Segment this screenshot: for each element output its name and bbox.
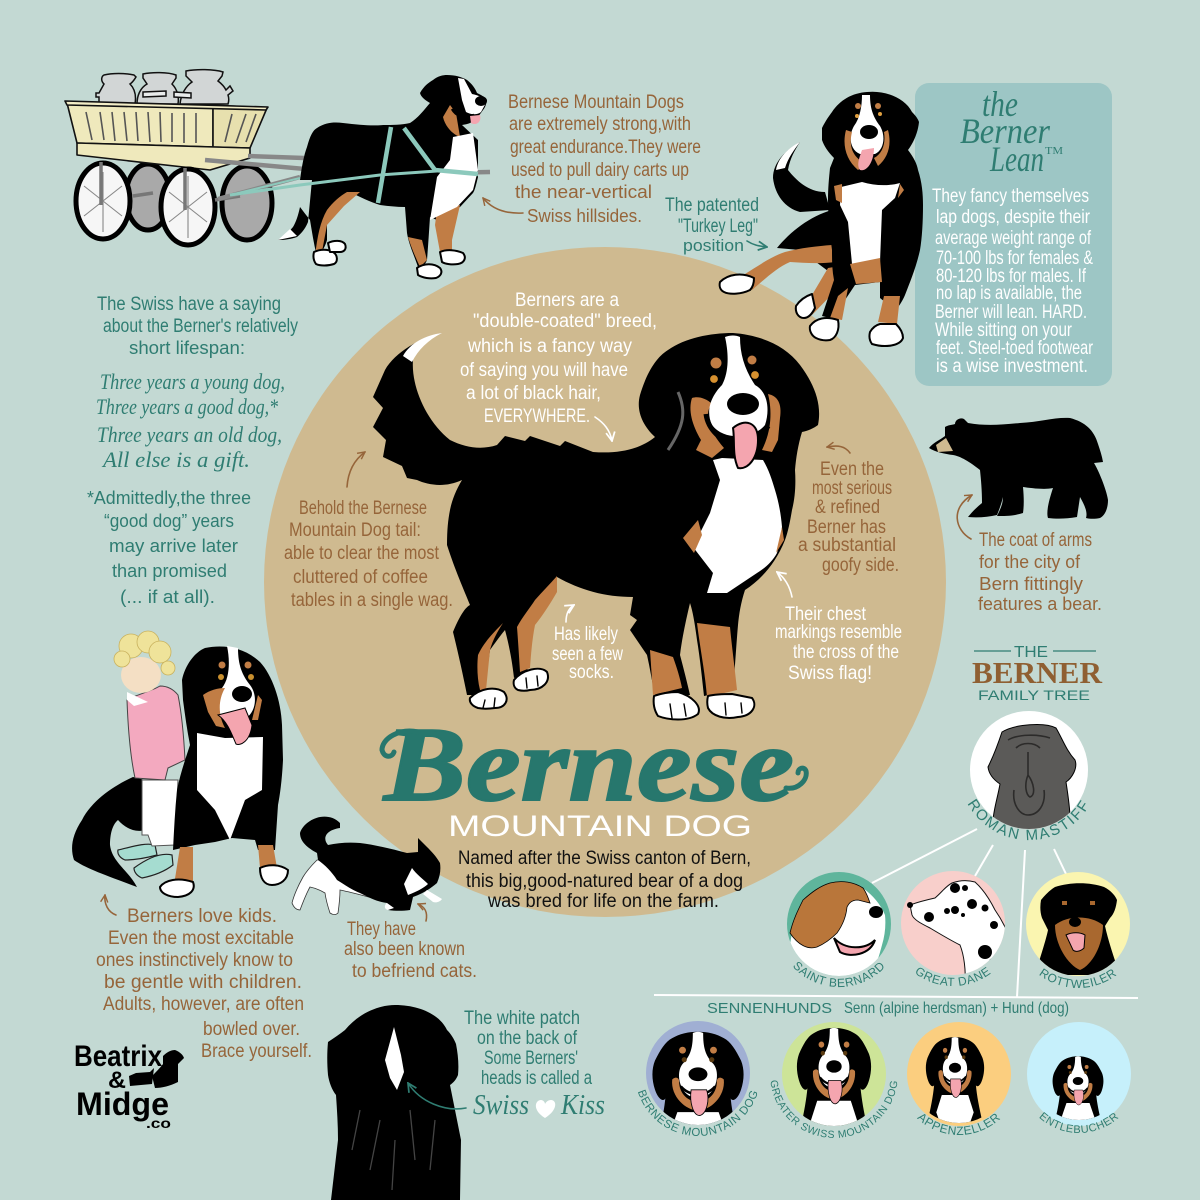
text: Turkey Leg note: "Turkey Leg" xyxy=(678,216,758,237)
tan cheeks xyxy=(690,394,780,458)
text: goofy side note: Even the xyxy=(820,459,884,480)
text: double coat note: "double-coated" breed, xyxy=(473,311,657,332)
text: goofy side note: Berner has xyxy=(807,517,886,538)
tan chest edges and belly xyxy=(834,184,904,284)
dog paws xyxy=(160,865,288,897)
text: Swiss Kiss note: on the back of xyxy=(477,1028,578,1049)
dog: white chest, tail tip and muzzle xyxy=(278,78,487,240)
text: goofy side note: a substantial xyxy=(798,535,896,556)
circle xyxy=(1026,872,1130,976)
panel body text: is a wise investment. xyxy=(936,356,1088,377)
portrait: Bernese Mountain Dog xyxy=(646,1021,750,1125)
dog blaze and muzzle xyxy=(216,646,255,718)
tan brows xyxy=(1062,901,1095,905)
text: double coat note: of saying you will have xyxy=(460,360,628,381)
text: dairy cart note xyxy=(508,92,701,226)
text: poem: Three years an old dog, xyxy=(97,422,282,447)
white blaze and muzzle xyxy=(709,336,768,436)
label: Entlebucher: ENTLEBUCHER xyxy=(1039,1112,1118,1133)
text: dairy cart note: Bernese Mountain Dogs xyxy=(508,92,684,113)
white Swiss kiss patch xyxy=(385,1027,404,1090)
text: dairy cart note: the near-vertical xyxy=(515,182,652,202)
text: chest marking note xyxy=(775,604,902,684)
nose xyxy=(1069,917,1081,927)
tail xyxy=(773,142,830,212)
arrow: to tail xyxy=(347,452,365,487)
text: double coat note: which is a fancy way xyxy=(467,336,632,357)
arrow: to chest xyxy=(777,572,792,597)
text: footnote: (... if at all). xyxy=(120,587,215,607)
text: kids note: Brace yourself. xyxy=(201,1041,312,1062)
text: cat note: They have xyxy=(347,919,416,940)
panel body text: no lap is available, the xyxy=(936,283,1082,304)
text: Sennenhunds heading xyxy=(707,1000,1069,1017)
wagon box xyxy=(65,101,268,170)
rear haunch and body xyxy=(777,210,860,280)
panel: the Berner Lean xyxy=(915,83,1112,386)
dog xyxy=(796,1028,872,1126)
text: socks note: socks. xyxy=(569,662,614,683)
cat tail and black body xyxy=(300,817,440,911)
portrait: Entlebucher xyxy=(1027,1022,1131,1132)
circle xyxy=(901,871,1005,975)
illustration: back of Berner's head xyxy=(327,1005,461,1200)
white head and chest xyxy=(790,888,886,976)
black head and body xyxy=(1035,883,1120,975)
text: tail note: cluttered of coffee xyxy=(293,567,428,588)
text: Swiss saying xyxy=(97,294,298,358)
panel body text: 80-120 lbs for males. If xyxy=(936,266,1087,287)
white tail tip xyxy=(403,333,442,362)
panel body text xyxy=(932,186,1094,377)
shoes xyxy=(118,844,173,878)
text: cat note: also been known xyxy=(344,939,465,960)
smile xyxy=(706,414,768,444)
white blaze and muzzle xyxy=(851,95,883,154)
text: Swiss Kiss note xyxy=(464,1008,592,1089)
tan inner leg xyxy=(812,266,840,315)
illustration: Turkey Leg dog xyxy=(720,92,923,346)
dane spots xyxy=(907,883,998,966)
dog: black coat xyxy=(278,75,487,267)
child's pants xyxy=(142,780,178,846)
label: Roman Mastiff: ROMAN MASTIFF xyxy=(968,798,1086,840)
text: kids note: be gentle with children. xyxy=(104,972,302,993)
jacket collar xyxy=(127,692,148,706)
arrow: to coat xyxy=(595,417,612,441)
text: intro: Named after the Swiss canton of Bern, xyxy=(458,848,751,869)
icon: heart xyxy=(536,1100,555,1118)
text: double coat note: EVERYWHERE. xyxy=(484,406,590,427)
eyes and brows xyxy=(855,103,882,118)
panel body text: They fancy themselves xyxy=(932,186,1089,207)
dane head and neck xyxy=(910,880,1005,974)
panel body text: 70-100 lbs for females & xyxy=(936,248,1093,269)
child's pink jacket xyxy=(127,686,185,780)
mouth xyxy=(834,938,875,955)
dog tan legs xyxy=(174,845,277,885)
text: goofy side note: & refined xyxy=(815,497,880,518)
tongue xyxy=(858,148,874,170)
logo dog xyxy=(152,1050,184,1088)
text: bear note: features a bear. xyxy=(978,594,1102,614)
text: goofy side note: goofy side. xyxy=(822,555,899,576)
label: Greater Swiss Mountain Dog: GREATER SWISS MOUNTAIN DOG xyxy=(770,1080,898,1138)
text: bear note xyxy=(978,530,1102,614)
mastiff head xyxy=(988,725,1076,830)
text: dairy cart note: great endurance.They were xyxy=(510,137,701,158)
arrow: to face xyxy=(827,446,850,453)
text: footnote: “good dog” years xyxy=(104,511,234,531)
text: Turkey Leg note: position xyxy=(683,236,744,255)
text: chest marking note: markings resemble xyxy=(775,622,902,643)
text: Swiss saying: The Swiss have a saying xyxy=(97,294,281,315)
fur strokes xyxy=(352,1110,435,1190)
illustration: dog pulling milk cart xyxy=(65,70,490,278)
text: intro: was bred for life on the farm. xyxy=(487,891,719,912)
text: poem: All else is a gift. xyxy=(101,447,250,472)
white paws xyxy=(470,669,754,720)
arrow: to turkey leg xyxy=(747,241,767,247)
dog tongue xyxy=(218,708,252,744)
label: Appenzeller: APPENZELLER xyxy=(917,1114,1000,1135)
portrait: Rottweiler xyxy=(1026,872,1130,976)
Sennenhunds: SENNENHUNDS xyxy=(707,1000,832,1017)
tan cheeks xyxy=(844,130,890,170)
text: tail note: Mountain Dog tail: xyxy=(289,520,421,541)
logo cat xyxy=(129,1068,154,1086)
text: kids note: ones instinctively know to xyxy=(96,950,293,971)
text: intro xyxy=(458,848,751,912)
text: Turkey Leg note xyxy=(665,195,759,255)
portrait: Great Dane xyxy=(901,871,1005,975)
circle xyxy=(907,1022,1011,1126)
white tail tip xyxy=(776,142,800,170)
text: Turkey Leg note: The patented xyxy=(665,195,759,216)
text: kids note xyxy=(96,906,312,1062)
label: Bernese Mountain Dog: BERNESE MOUNTAIN DOG xyxy=(638,1090,758,1136)
circle xyxy=(1027,1022,1131,1126)
eyes and brows xyxy=(710,356,760,384)
text: kids note: bowled over. xyxy=(203,1019,300,1040)
text: kids note: Adults, however, are often xyxy=(103,994,304,1015)
panel background xyxy=(915,83,1112,386)
dog xyxy=(652,1032,744,1125)
circle xyxy=(787,872,891,976)
cat white chest and paws xyxy=(385,868,442,910)
THE: THE xyxy=(1014,644,1048,661)
text: socks note: seen a few xyxy=(552,644,623,665)
logo words: .co xyxy=(146,1115,171,1131)
text: kids note: Berners love kids. xyxy=(127,906,277,927)
wheel spokes and axles xyxy=(84,162,240,238)
portrait: Roman Mastiff xyxy=(970,711,1088,830)
text: tail note xyxy=(284,498,453,611)
portrait: Appenzeller xyxy=(907,1022,1011,1131)
text: chest marking note: Swiss flag! xyxy=(788,663,872,684)
text: footnote xyxy=(87,488,251,607)
cart shafts xyxy=(205,156,490,199)
teal harness xyxy=(230,127,478,203)
arrow: to Swiss Kiss xyxy=(408,1083,466,1109)
milk cans xyxy=(96,70,233,104)
text: bear note: Bern fittingly xyxy=(979,574,1083,594)
text: kids note: Even the most excitable xyxy=(108,928,294,949)
dog tail xyxy=(72,777,145,887)
title swash xyxy=(382,731,806,788)
text: footnote: than promised xyxy=(112,561,227,581)
text: bear note: for the city of xyxy=(979,552,1081,572)
text: double coat note xyxy=(460,290,657,427)
dog: paws xyxy=(313,241,465,278)
dog black body xyxy=(173,647,283,850)
child's curly hair xyxy=(114,631,175,675)
panel body text: lap dogs, despite their xyxy=(936,207,1091,228)
panel title: the xyxy=(982,84,1018,124)
logo words: Midge xyxy=(76,1086,169,1122)
circle xyxy=(782,1022,886,1126)
text: double coat note: a lot of black hair, xyxy=(466,383,601,404)
circle xyxy=(646,1021,750,1125)
tongue xyxy=(733,423,758,468)
text: dairy cart note: used to pull dairy carts up xyxy=(511,160,689,181)
text: dairy cart note: Swiss hillsides. xyxy=(527,206,642,226)
tan chest edges xyxy=(683,520,784,553)
text: cat note xyxy=(344,919,477,982)
label: Rottweiler: ROTTWEILER xyxy=(1039,968,1116,988)
text: footnote: may arrive later xyxy=(109,536,238,556)
nose xyxy=(860,125,878,139)
arrow: to bear xyxy=(957,495,972,539)
text: tail note: able to clear the most xyxy=(284,543,440,564)
text: chest marking note: the cross of the xyxy=(793,642,899,663)
text: Swiss saying: about the Berner's relatively xyxy=(103,316,298,337)
black torso and head xyxy=(822,92,923,320)
white rear paws xyxy=(720,275,815,318)
tan front legs xyxy=(830,288,900,324)
etymology: Senn (alpine herdsman) + Hund (dog) xyxy=(844,1000,1069,1017)
dog xyxy=(925,1037,985,1131)
tan central circle xyxy=(264,247,946,917)
text: goofy side note: most serious xyxy=(812,478,892,499)
dog: mouth, nose and tongue xyxy=(452,96,487,124)
illustration: child with Bernese xyxy=(72,631,288,897)
white chest xyxy=(840,182,900,264)
dog eyes and brows xyxy=(218,662,254,680)
child's face xyxy=(121,657,161,693)
text: footnote: *Admittedly,the three xyxy=(87,488,251,508)
heading rules xyxy=(974,650,1096,652)
illustration: main Bernese Mountain Dog xyxy=(373,333,819,720)
portrait: Greater Swiss Mountain Dog xyxy=(782,1022,886,1126)
white front paws xyxy=(810,318,903,346)
text: Swiss saying: short lifespan: xyxy=(129,338,245,358)
panel title: Berner xyxy=(960,111,1051,151)
front wheels xyxy=(76,163,215,245)
subtitle: Mountain Dog: MOUNTAIN DOG xyxy=(448,810,752,843)
text: Swiss Kiss note: The white patch xyxy=(464,1008,580,1029)
text: Swiss Kiss: Swiss xyxy=(473,1090,529,1121)
FAMILY TREE: FAMILY TREE xyxy=(978,687,1090,703)
label: Great Dane: GREAT DANE xyxy=(916,966,991,986)
illustration: black and white cat xyxy=(292,817,442,914)
text: socks note: Has likely xyxy=(554,624,618,645)
dog nose xyxy=(232,686,252,702)
text: poem: Three years a good dog,* xyxy=(96,394,278,419)
portrait circle xyxy=(970,711,1088,829)
cat white legs and belly xyxy=(292,860,400,914)
panel body text: Berner will lean. HARD. xyxy=(935,302,1087,323)
nose xyxy=(869,906,883,918)
tan legs xyxy=(477,576,737,697)
dog white chest xyxy=(197,733,263,840)
arrow: to cat xyxy=(418,904,427,921)
text: Swiss Kiss xyxy=(473,1090,605,1121)
tongue xyxy=(1066,933,1085,951)
panel body text: feet. Steel-toed footwear xyxy=(936,338,1094,359)
text: poem xyxy=(96,369,285,472)
white chest xyxy=(693,458,782,593)
label: Saint Bernard: SAINT BERNARD xyxy=(794,962,884,988)
panel body text: While sitting on your xyxy=(935,320,1073,341)
panel body text: average weight range of xyxy=(935,228,1092,249)
logo words: Beatrix xyxy=(74,1040,162,1073)
text: tail note: tables in a single wag. xyxy=(291,590,453,611)
panel title xyxy=(960,84,1063,179)
dog xyxy=(1052,1056,1104,1120)
back wheels xyxy=(126,164,272,240)
illustration: black bear xyxy=(929,418,1108,519)
dog: tan legs and cheek xyxy=(315,105,460,267)
mastiff wrinkles xyxy=(1008,735,1050,815)
text: goofy side note xyxy=(798,459,899,576)
portrait: Saint Bernard xyxy=(787,872,891,985)
extended tan rear leg xyxy=(745,245,836,290)
title: Bernese: Bernese xyxy=(383,706,794,823)
text: double coat note: Berners are a xyxy=(515,290,619,311)
text: cat note: to befriend cats. xyxy=(352,961,477,982)
text: Swiss Kiss note: heads is called a xyxy=(481,1068,592,1089)
text: poem: Three years a young dog, xyxy=(100,369,285,394)
text: socks note xyxy=(552,624,623,683)
BERNER: BERNER xyxy=(972,655,1103,690)
text: chest marking note: Their chest xyxy=(785,604,867,625)
logo words: & xyxy=(108,1067,126,1094)
text: tail note: Behold the Bernese xyxy=(299,498,427,519)
text: intro: this big,good-natured bear of a dog xyxy=(466,871,743,892)
text: Swiss Kiss: Kiss xyxy=(560,1090,605,1121)
text: dairy cart note: are extremely strong,with xyxy=(509,114,691,135)
paw toes xyxy=(483,676,742,718)
bear snout xyxy=(936,438,953,452)
heading: Berner family tree xyxy=(972,644,1103,703)
arrow: to cart dog xyxy=(483,198,523,213)
panel title: TM xyxy=(1045,145,1063,157)
black coat silhouette xyxy=(373,333,819,696)
text: bear note: The coat of arms xyxy=(979,530,1092,551)
arrow: to socks xyxy=(566,605,574,622)
family tree connector lines xyxy=(654,829,1138,998)
brown head patch xyxy=(790,882,870,948)
tan muzzle xyxy=(1055,918,1103,970)
bear body xyxy=(929,418,1108,519)
text: Swiss Kiss note: Some Berners' xyxy=(484,1048,578,1069)
dog tan cheeks xyxy=(203,688,262,728)
arrow: to child and dog xyxy=(105,895,116,915)
panel title: Lean xyxy=(989,139,1044,179)
logo words xyxy=(74,1040,171,1131)
nose xyxy=(727,393,759,415)
head and back silhouette xyxy=(327,1005,461,1200)
gray ear highlight xyxy=(668,392,683,450)
logo: Beatrix & Midge xyxy=(74,1040,184,1131)
